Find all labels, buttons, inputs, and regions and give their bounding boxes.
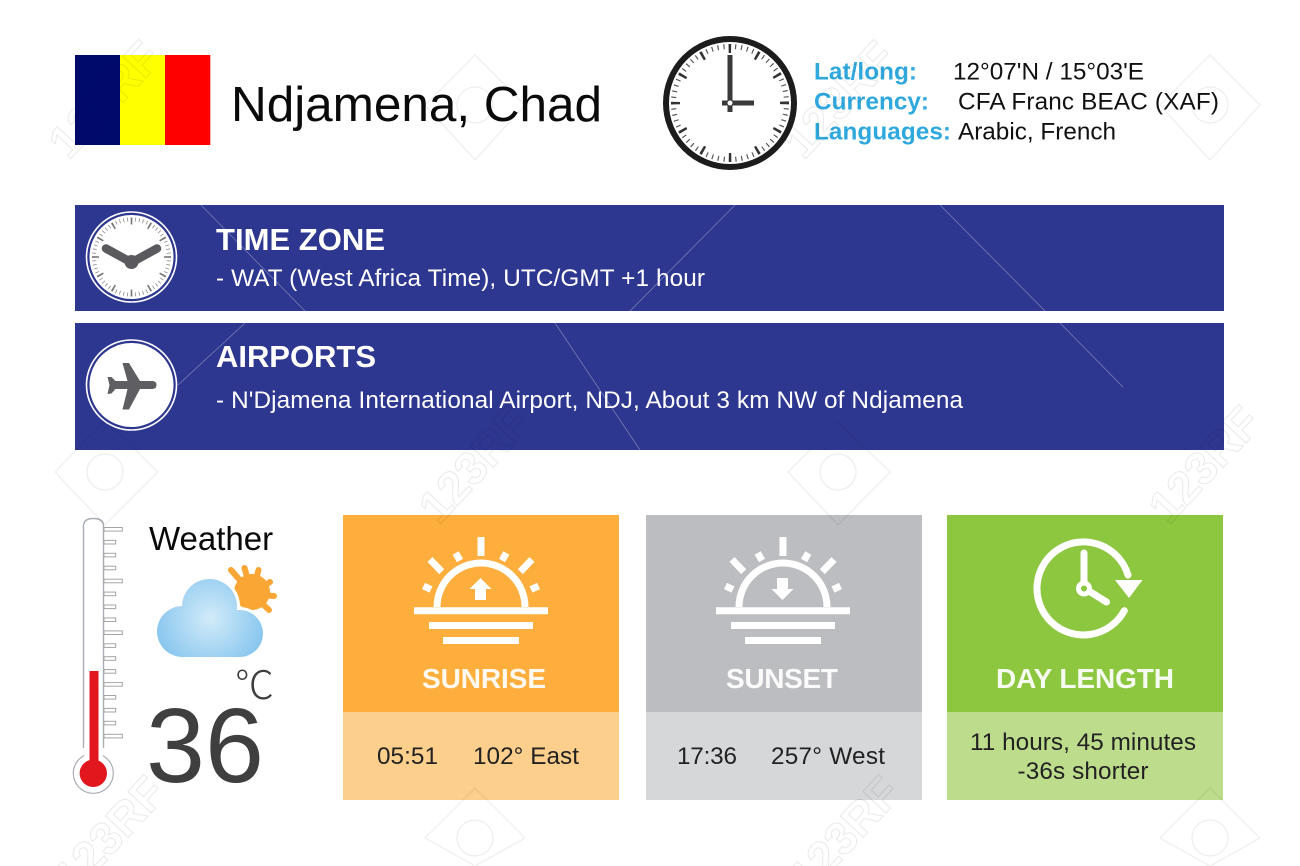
heading: airports: AIRPORTS (216, 339, 376, 374)
panel: sunset (646, 515, 922, 800)
panel: airports (75, 323, 1224, 450)
location facts: Lat/long: (814, 58, 917, 86)
day length change: -36s shorter (1018, 758, 1148, 785)
heading: time zone: TIME ZONE (216, 222, 385, 257)
sunset bearing: 257° West (771, 743, 885, 770)
sunrise time: 05:51 (377, 743, 438, 770)
text: 123RF (408, 396, 540, 533)
day length value: 11 hours, 45 minutes (970, 729, 1196, 756)
sunrise bearing: 102° East (473, 743, 579, 770)
sunset time: 17:36 (677, 743, 737, 770)
text: 123RF (773, 31, 905, 168)
flag of Chad (75, 55, 210, 145)
label: day length: DAY LENGTH (996, 663, 1174, 694)
icon: airplane (86, 340, 176, 430)
temperature unit: ℃ (235, 655, 274, 711)
location facts: Currency: (814, 88, 929, 116)
temperature value: 36 (146, 687, 264, 805)
location facts: CFA Franc BEAC (XAF) (958, 88, 1219, 116)
text: 123RF (38, 31, 170, 168)
panel: day length (947, 515, 1223, 800)
location facts: 12°07'N / 15°03'E (953, 58, 1144, 86)
icon: thermometer (73, 518, 122, 793)
location facts: Arabic, French (958, 118, 1116, 146)
icon: time zone clock (86, 212, 176, 302)
title: Ndjamena, Chad (231, 77, 602, 132)
label: sunset: SUNSET (726, 663, 838, 694)
icon: sunset (716, 537, 850, 640)
location facts: Languages: (814, 118, 951, 146)
heading: weather: Weather (149, 520, 273, 557)
text: airport detail: - N'Djamena International Airport, NDJ, About 3 km NW of Ndjamena (216, 387, 963, 414)
panel: sunrise (343, 515, 619, 800)
panel: time zone (75, 205, 1224, 311)
icon: partly cloudy (157, 568, 274, 657)
icon: day length (1037, 542, 1142, 635)
icon: wall clock (666, 39, 794, 167)
text: time zone detail: - WAT (West Africa Time), UTC/GMT +1 hour (216, 265, 705, 292)
label: sunrise: SUNRISE (422, 663, 546, 694)
icon: sunrise (414, 537, 548, 640)
location facts (814, 58, 1219, 146)
text: 123RF (1138, 396, 1270, 533)
